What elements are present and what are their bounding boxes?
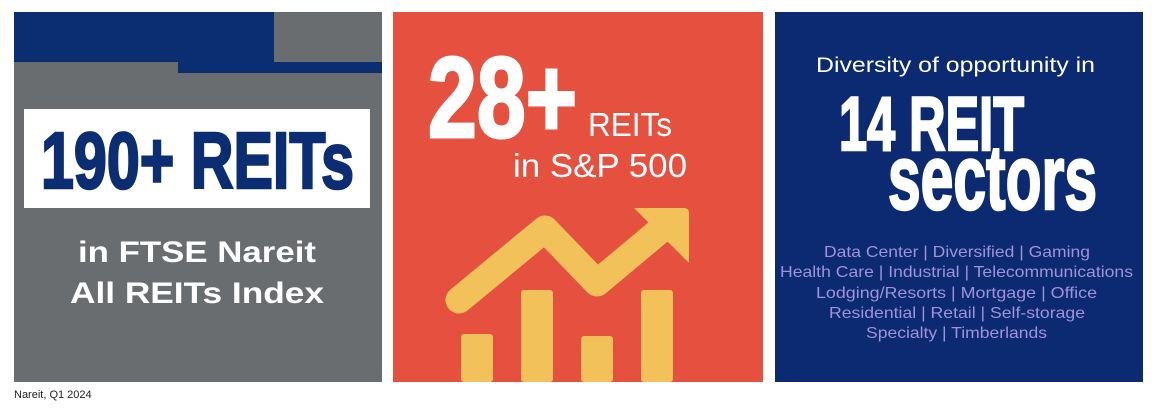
subtext: in FTSE Nareit All REITs Index: All REITs Index	[70, 277, 324, 310]
headline: 14 REIT sectors	[839, 82, 1097, 229]
headline: 28+ REITs in S&P 500: REITs	[588, 106, 672, 143]
headline: 28+ REITs in S&P 500: 28+	[428, 35, 577, 162]
sector list: Residential | Retail | Self-storage	[829, 305, 1085, 322]
sector list: Specialty | Timberlands	[866, 325, 1047, 342]
headline box: 190+ REITs	[24, 109, 370, 208]
headline box: 190+ REITs: 190+ REITs	[41, 116, 354, 205]
headline: 28+ REITs in S&P 500	[428, 35, 687, 184]
icon: rising chart with arrow	[459, 208, 689, 382]
headline: 14 REIT sectors: 14 REIT	[839, 82, 1024, 167]
headline: 28+ REITs in S&P 500: in S&P 500	[513, 147, 687, 184]
decorative navy header block	[14, 12, 274, 62]
subtext: in FTSE Nareit All REITs Index: in FTSE Nareit	[78, 236, 316, 269]
sector list	[780, 244, 1133, 342]
subtext: in FTSE Nareit All REITs Index	[70, 236, 324, 310]
panel: REIT sectors	[775, 12, 1143, 382]
heading: Diversity of opportunity in: Diversity of opportunity in	[816, 54, 1095, 77]
sector list: Lodging/Resorts | Mortgage | Office	[816, 285, 1097, 302]
sector list: Data Center | Diversified | Gaming	[824, 244, 1090, 261]
sector list: Health Care | Industrial | Telecommunications	[780, 264, 1133, 281]
panel: FTSE Nareit count	[14, 12, 382, 382]
footnote: source: Nareit, Q1 2024	[14, 389, 92, 401]
panel: S&P 500	[393, 12, 763, 382]
